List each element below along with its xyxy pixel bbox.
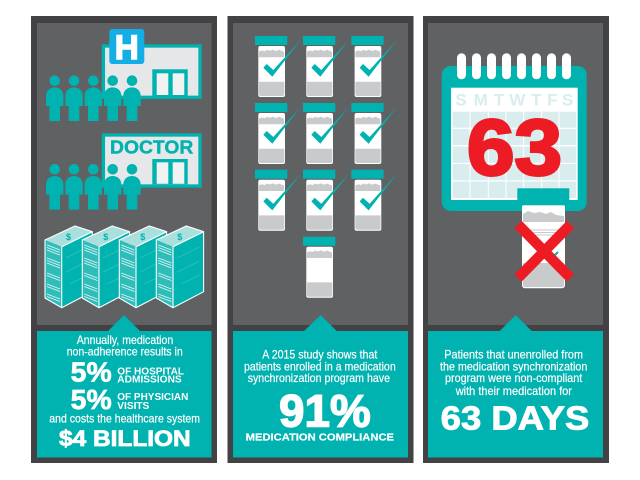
callout: 63 days statistic: Patients that unenrolled from bbox=[444, 347, 583, 361]
panel: non-adherence costs bbox=[31, 16, 217, 463]
doctor office building: DOCTOR bbox=[110, 137, 193, 157]
callout: 63 days statistic: program were non-compliant bbox=[445, 371, 583, 385]
calendar: F bbox=[547, 91, 557, 110]
calendar bbox=[442, 53, 587, 211]
callout: non-adherence statistics: 5% bbox=[71, 357, 112, 388]
calendar: 63 bbox=[467, 102, 562, 192]
calendar: T bbox=[494, 91, 505, 110]
callout: 63 days statistic: with their medication for bbox=[455, 384, 572, 398]
money stacks: $ bbox=[140, 232, 145, 242]
icon: red X bbox=[518, 224, 570, 278]
callout: compliance statistic bbox=[233, 315, 408, 458]
callout: non-adherence statistics: VISITS bbox=[117, 400, 149, 412]
callout: 63 days statistic: 63 DAYS bbox=[441, 399, 589, 436]
callout: compliance statistic: 91% bbox=[279, 386, 371, 437]
money stacks bbox=[45, 226, 204, 308]
callout: non-adherence statistics: $4 BILLION bbox=[59, 426, 191, 451]
calendar: T bbox=[531, 91, 542, 110]
hospital building bbox=[103, 29, 200, 97]
callout: non-adherence statistics: ADMISSIONS bbox=[117, 374, 182, 386]
calendar: W bbox=[509, 91, 526, 110]
unchecked bottle bbox=[303, 237, 335, 298]
money stacks: $ bbox=[177, 232, 182, 242]
bottle grid with check marks bbox=[255, 36, 397, 231]
callout: compliance statistic: synchronization program have bbox=[248, 371, 390, 385]
callout: non-adherence statistics: and costs the healthcare system bbox=[49, 412, 200, 426]
callout: 63 days statistic: the medication synchronization bbox=[440, 360, 587, 374]
calendar: S bbox=[562, 91, 573, 110]
money stacks: $ bbox=[66, 232, 71, 242]
callout: non-adherence statistics: OF PHYSICIAN bbox=[117, 391, 188, 403]
callout: non-adherence statistics: Annually, medication bbox=[77, 333, 173, 347]
calendar: M bbox=[474, 91, 488, 110]
panel: non-compliance after unenrolling bbox=[423, 16, 609, 463]
hospital building: H bbox=[115, 29, 139, 67]
callout: non-adherence statistics: OF HOSPITAL bbox=[117, 365, 185, 377]
callout: 63 days statistic bbox=[428, 315, 603, 458]
callout: non-adherence statistics: 5% bbox=[71, 384, 112, 415]
calendar: S bbox=[455, 91, 467, 110]
crossed-out bottle bbox=[517, 188, 570, 288]
doctor patients icons bbox=[46, 164, 141, 210]
panel: medication compliance bbox=[228, 16, 414, 463]
money stacks: $ bbox=[103, 232, 108, 242]
hospital patients icons bbox=[46, 75, 141, 121]
callout: compliance statistic: patients enrolled in a medication bbox=[244, 360, 396, 374]
callout: compliance statistic: A 2015 study shows that bbox=[262, 347, 378, 361]
callout: non-adherence statistics: non-adherence results in bbox=[67, 345, 183, 359]
callout: compliance statistic: MEDICATION COMPLIANCE bbox=[246, 432, 394, 444]
doctor office building bbox=[103, 135, 200, 186]
callout: non-adherence statistics bbox=[37, 315, 212, 458]
